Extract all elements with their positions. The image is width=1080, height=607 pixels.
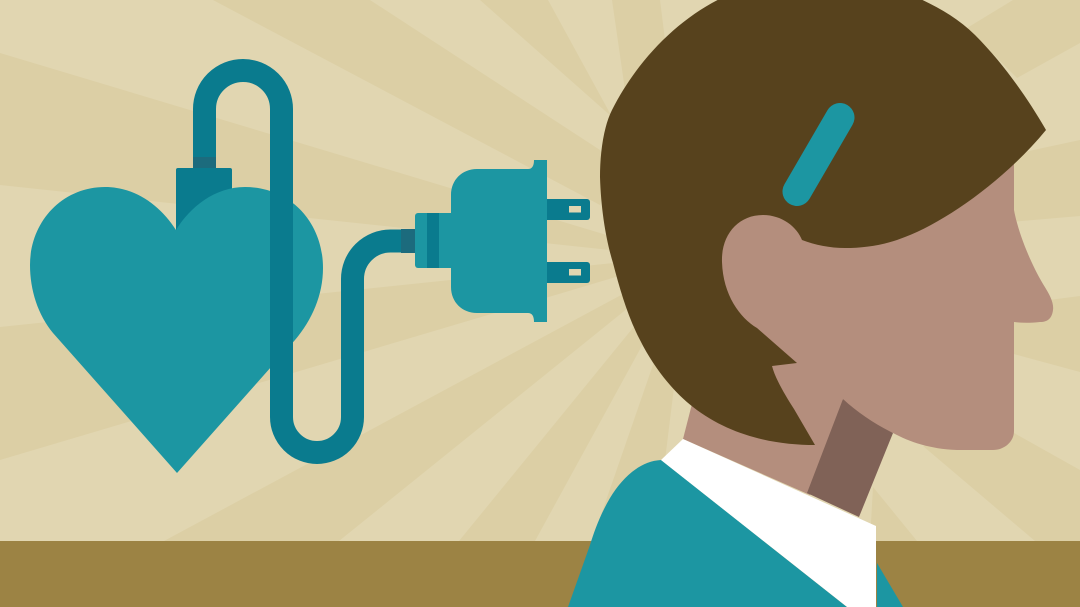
icon: plug xyxy=(415,160,590,322)
cable collar: plug end xyxy=(401,229,416,253)
face xyxy=(700,150,1053,450)
power cable xyxy=(204,70,416,452)
icon: heart connector xyxy=(176,168,232,238)
jacket xyxy=(568,460,903,607)
shirt collar xyxy=(661,439,876,607)
neck xyxy=(683,380,870,495)
plug prongs xyxy=(540,199,590,283)
plug body xyxy=(451,160,547,322)
plug neck xyxy=(415,213,455,268)
ground band xyxy=(0,541,1080,607)
person xyxy=(568,0,1053,607)
neck shadow xyxy=(807,399,893,517)
hair pin xyxy=(797,118,840,192)
hair xyxy=(600,0,1046,445)
icon: heart xyxy=(30,187,323,473)
cable collar: heart end xyxy=(193,157,216,168)
